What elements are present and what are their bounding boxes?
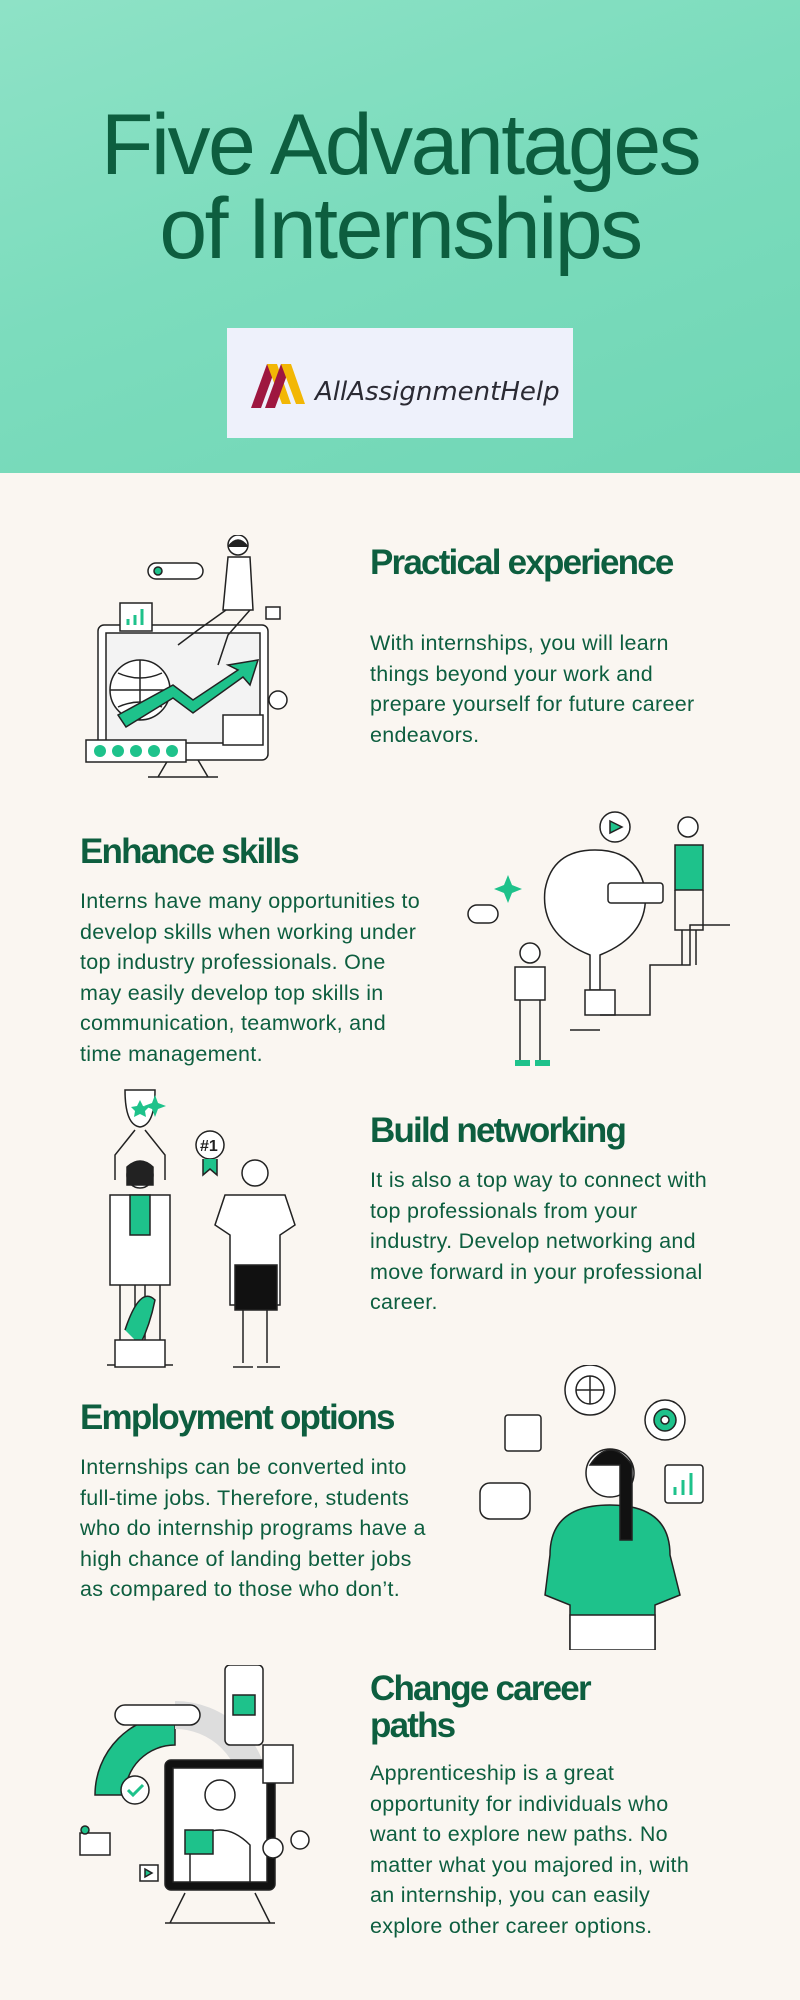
section 3 illustration: trophy and two people: #1 bbox=[200, 1138, 218, 1155]
section 3 text: career. bbox=[370, 1290, 438, 1314]
section 2 text: communication, teamwork, and bbox=[80, 1011, 386, 1035]
section 4 text bbox=[80, 1455, 426, 1601]
section 2 heading: Enhance skills bbox=[80, 832, 298, 871]
section 5 text: an internship, you can easily bbox=[370, 1883, 650, 1907]
section 3 text: move forward in your professional bbox=[370, 1260, 703, 1284]
section 2 text: Interns have many opportunities to bbox=[80, 889, 420, 913]
logo text: AllAssignmentHelp bbox=[313, 377, 560, 407]
section 2 text: top industry professionals. One bbox=[80, 950, 386, 974]
section 3 text: top professionals from your bbox=[370, 1199, 637, 1223]
section 3 text bbox=[370, 1168, 707, 1314]
section 1 text: prepare yourself for future career bbox=[370, 692, 694, 716]
section 3 heading: Build networking bbox=[370, 1111, 625, 1150]
section 3 text: industry. Develop networking and bbox=[370, 1229, 696, 1253]
section 4 heading: Employment options bbox=[80, 1398, 394, 1437]
section 1 text bbox=[370, 631, 694, 747]
title: Five Advantages bbox=[101, 97, 699, 193]
section 4 text: Internships can be converted into bbox=[80, 1455, 407, 1479]
title bbox=[101, 97, 699, 277]
section 1 illustration: monitor with growth arrow bbox=[85, 535, 288, 778]
section 5 text: want to explore new paths. No bbox=[370, 1822, 668, 1846]
section 2 text: time management. bbox=[80, 1042, 263, 1066]
section 4 text: full-time jobs. Therefore, students bbox=[80, 1486, 409, 1510]
section 5 heading: paths bbox=[370, 1706, 454, 1745]
section 2 illustration: lightbulb and people bbox=[467, 811, 730, 1066]
header banner bbox=[0, 0, 800, 473]
section 5 illustration: laptop person with chart bbox=[79, 1665, 310, 1924]
section 5 text: Apprenticeship is a great bbox=[370, 1761, 614, 1785]
section 5 text bbox=[370, 1761, 689, 1938]
logo box bbox=[227, 328, 573, 438]
section 1 heading: Practical experience bbox=[370, 543, 673, 582]
section 5 text: explore other career options. bbox=[370, 1914, 652, 1938]
section 4 illustration: woman with icons bbox=[479, 1365, 704, 1650]
section 4 text: who do internship programs have a bbox=[80, 1516, 426, 1540]
section 1 text: things beyond your work and bbox=[370, 662, 653, 686]
section 2 text: develop skills when working under bbox=[80, 920, 416, 944]
section 3 text: It is also a top way to connect with bbox=[370, 1168, 707, 1192]
section 5 heading: Change career bbox=[370, 1669, 590, 1708]
section 2 text: may easily develop top skills in bbox=[80, 981, 384, 1005]
section 4 text: as compared to those who don’t. bbox=[80, 1577, 400, 1601]
title: of Internships bbox=[159, 181, 641, 277]
section 1 text: endeavors. bbox=[370, 723, 479, 747]
section 4 text: high chance of landing better jobs bbox=[80, 1547, 412, 1571]
section 1 text: With internships, you will learn bbox=[370, 631, 669, 655]
section 3 illustration: trophy and two people bbox=[107, 1089, 296, 1368]
logo icon bbox=[251, 364, 305, 408]
section 5 heading bbox=[370, 1669, 592, 1745]
section 5 text: opportunity for individuals who bbox=[370, 1792, 669, 1816]
section 2 text bbox=[80, 889, 420, 1066]
section 5 text: matter what you majored in, with bbox=[370, 1853, 689, 1877]
